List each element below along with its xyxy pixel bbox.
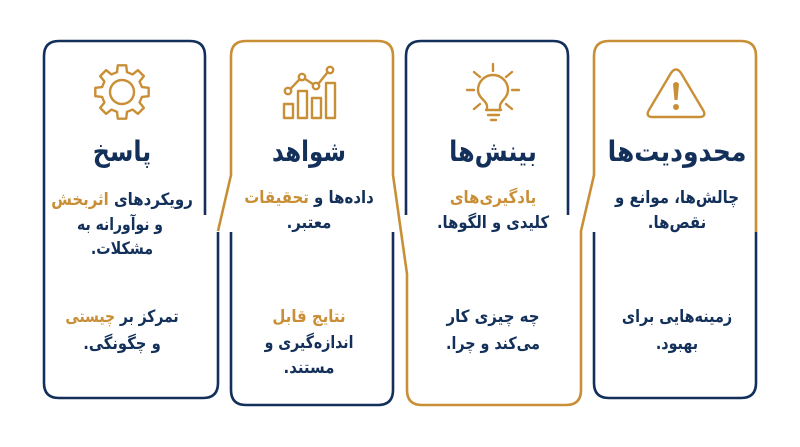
text block: insights description: کلیدی و الگوها. bbox=[437, 212, 550, 232]
text block: response description: رویکردهای اثربخش bbox=[51, 189, 193, 209]
text block: response description: مشکلات. bbox=[91, 238, 153, 258]
text block: insights description: یادگیری‌های bbox=[450, 187, 536, 207]
panel: insights upper frame bbox=[406, 41, 568, 215]
text block: evidence description: معتبر. bbox=[287, 212, 331, 232]
text block: response focus: و چگونگی. bbox=[83, 333, 161, 354]
text block: limitations description: نقص‌ها. bbox=[648, 212, 706, 232]
text block: limitations description: چالش‌ها، موانع و bbox=[614, 187, 739, 208]
text block: insights what works bbox=[446, 306, 540, 354]
icon: bar chart with trend line bbox=[284, 67, 335, 118]
text block: limitations improvement: بهبود. bbox=[656, 333, 698, 353]
text block: response description: و نوآورانه به bbox=[77, 214, 163, 234]
text block: limitations improvement: زمینه‌هایی برای bbox=[622, 306, 732, 326]
text block: evidence results: اندازه‌گیری و bbox=[264, 332, 353, 352]
icon: light bulb bbox=[467, 64, 519, 120]
text block: insights what works: چه چیزی کار bbox=[446, 306, 540, 327]
text block: limitations improvement bbox=[622, 306, 732, 353]
text block: limitations description bbox=[614, 187, 739, 232]
heading: response: پاسخ bbox=[93, 136, 151, 169]
text block: insights what works: می‌کند و چرا. bbox=[446, 333, 540, 354]
text block: evidence results: مستند. bbox=[284, 357, 334, 377]
heading: evidence: شواهد bbox=[272, 136, 346, 169]
text block: evidence results: نتایج قابل bbox=[272, 306, 346, 326]
heading: insights: بینش‌ها bbox=[449, 136, 537, 169]
text block: evidence description: داده‌ها و تحقیقات bbox=[244, 187, 374, 207]
text block: insights description bbox=[437, 187, 550, 232]
icon: gear bbox=[95, 65, 149, 119]
icon: warning triangle bbox=[648, 70, 704, 117]
text block: response focus bbox=[65, 307, 179, 354]
panel: evidence lower frame bbox=[231, 232, 393, 405]
panel: response frame bbox=[44, 41, 218, 398]
text block: response focus: تمرکز بر چیستی bbox=[65, 307, 179, 327]
panel: limitations lower frame bbox=[594, 232, 756, 398]
panel outline: gold connected frame bbox=[218, 41, 756, 405]
text block: evidence description bbox=[244, 187, 374, 232]
text block: response description bbox=[51, 189, 193, 258]
text block: evidence results bbox=[264, 306, 353, 377]
heading: limitations: محدودیت‌ها bbox=[608, 136, 746, 168]
